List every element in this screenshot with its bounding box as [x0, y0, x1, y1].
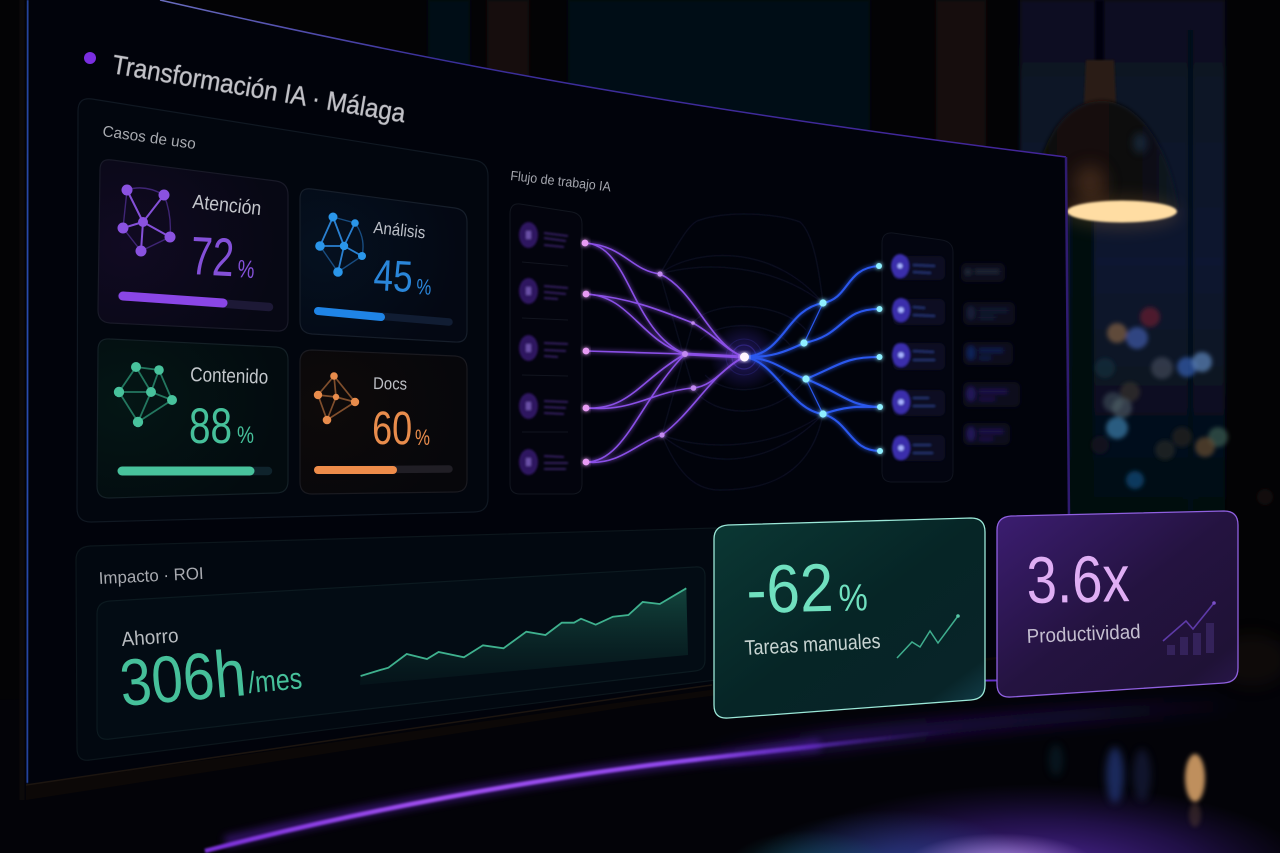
panel: impacto ROI — [76, 528, 716, 760]
blue workflow lines — [744, 266, 880, 451]
flow nodes — [582, 240, 883, 465]
label: análisis: Análisis — [373, 218, 426, 242]
title dot — [84, 52, 96, 64]
label: docs: Docs — [373, 374, 407, 394]
label: contenido: Contenido — [190, 364, 269, 389]
card: docs — [300, 350, 467, 494]
unit: percent: % — [416, 274, 432, 300]
input list — [510, 204, 582, 494]
heading: impacto ROI: Impacto · ROI — [98, 564, 204, 588]
value: 306h: 306h — [117, 635, 249, 720]
icon: green network — [114, 362, 177, 427]
value: 72%: 72 — [189, 226, 235, 288]
progress bar — [318, 469, 449, 470]
unit: percent: % — [415, 425, 430, 450]
heading: flujo de trabajo IA: Flujo de trabajo IA — [510, 168, 612, 194]
panel: flujo de trabajo IA — [510, 168, 1020, 494]
icon: green sparkline — [897, 614, 960, 658]
unit: percent: % — [237, 255, 255, 284]
icon: purple network — [118, 184, 176, 256]
floor with purple LED strip — [0, 634, 1280, 853]
panel: casos de uso — [77, 99, 488, 522]
icon: blue network — [315, 212, 366, 277]
progress bar — [318, 311, 449, 322]
card: atención — [98, 160, 288, 331]
callout: tareas manuales — [714, 518, 985, 718]
unit: percent: % — [237, 422, 254, 449]
label: ahorro: Ahorro — [121, 625, 179, 651]
value: 88%: 88 — [189, 398, 232, 454]
callout: productividad — [997, 511, 1238, 697]
progress bar — [122, 296, 269, 307]
card: contenido — [97, 339, 288, 498]
faded secondary chips — [961, 263, 1020, 445]
inner savings card — [97, 567, 705, 739]
icon: orange network — [314, 372, 359, 424]
area chart — [360, 588, 688, 685]
value: 3.6x: 3.6x — [1026, 541, 1130, 617]
heading: casos de uso: Casos de uso — [101, 123, 197, 153]
value: -62%: -62 — [745, 550, 834, 628]
window city bokeh lights — [1091, 307, 1273, 505]
label: atención: Atención — [191, 191, 262, 220]
dashboard screen — [22, 0, 1070, 800]
faint concentric field lines — [660, 214, 823, 490]
purple workflow lines — [585, 243, 744, 462]
unit: percent: % — [838, 577, 868, 620]
link between callouts — [984, 680, 998, 681]
output list — [882, 233, 953, 482]
icon: bars and trend — [1163, 601, 1216, 655]
label: productividad: Productividad — [1026, 621, 1141, 648]
pendant lamp — [1033, 0, 1180, 229]
card: análisis — [300, 189, 467, 342]
value: 60%: 60 — [372, 401, 412, 454]
label: tareas manuales: Tareas manuales — [744, 630, 881, 660]
progress bar — [122, 467, 268, 475]
value: 45%: 45 — [372, 251, 414, 302]
unit: per month: /mes — [247, 662, 303, 700]
title: Transformación IA · Málaga — [110, 49, 409, 129]
